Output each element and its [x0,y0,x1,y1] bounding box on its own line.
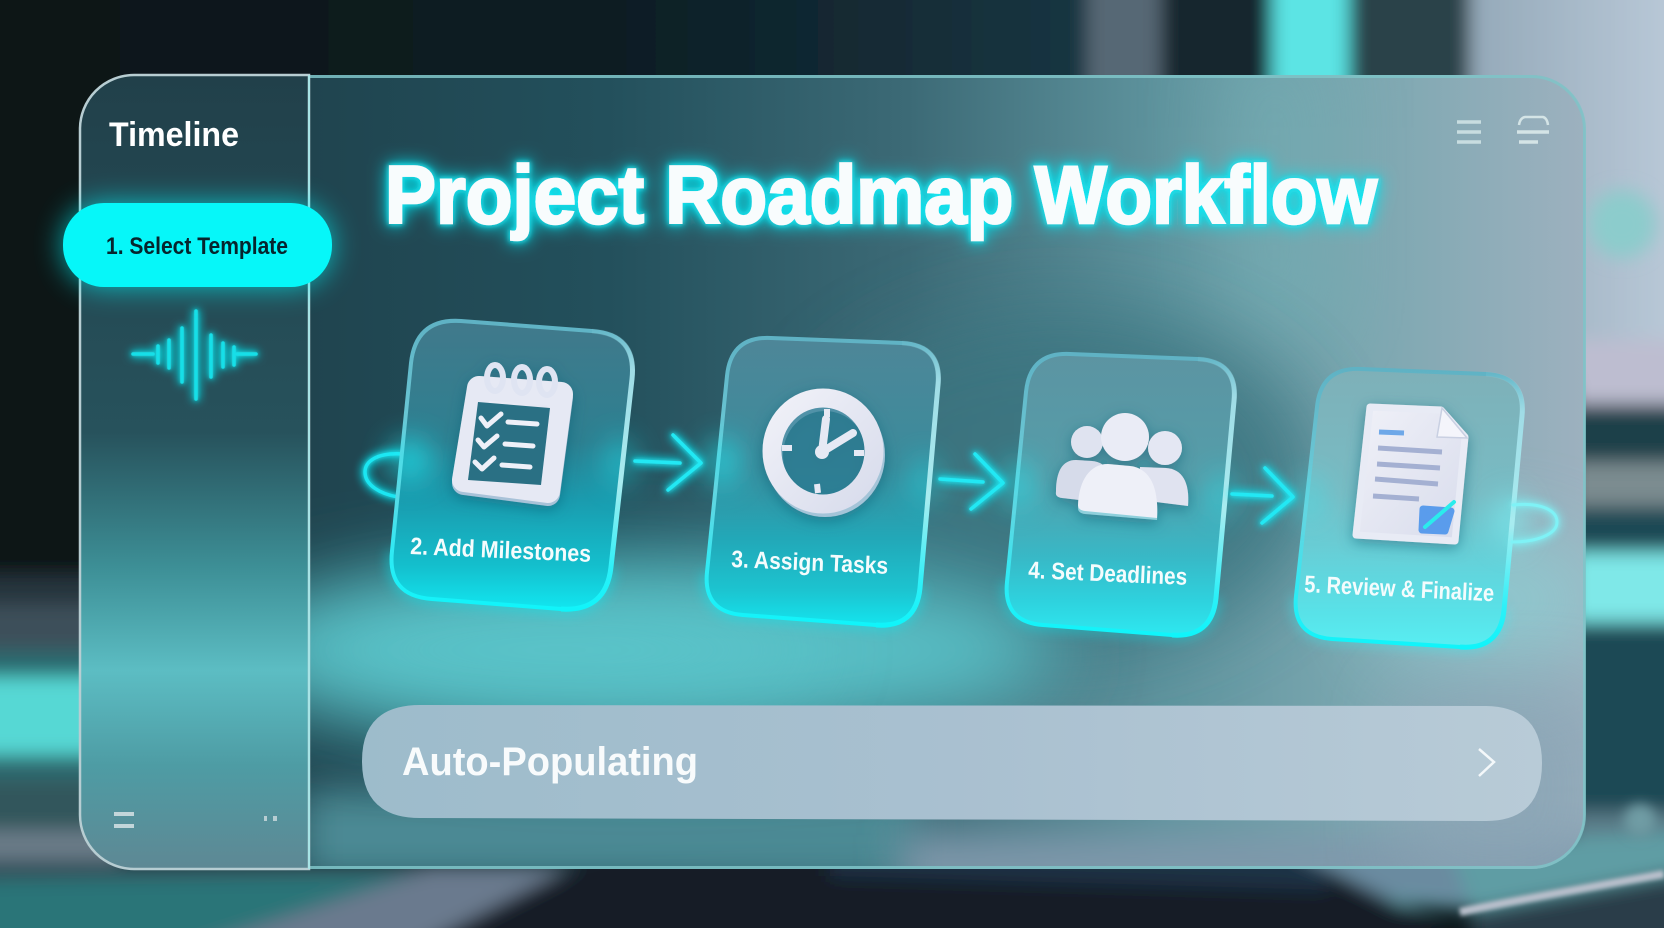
arrow: step 2 to 3 [635,435,701,490]
active step pill: 1. Select Template: 1. Select Template [106,233,288,260]
icon: document with pen [1356,407,1467,541]
label: 3. Assign Tasks [731,546,889,580]
icon: clock [772,398,876,508]
label: 2. Add Milestones [410,533,592,568]
main title: Project Roadmap Workflow [385,150,1377,241]
label: 5. Review & Finalize [1304,571,1495,607]
label: 4. Set Deadlines [1028,557,1188,591]
icon: chevron right [1479,749,1494,776]
icon: checklist notepad [464,365,561,494]
waveform icon [133,311,256,399]
card: 3. Assign Tasks [704,338,939,625]
arrow: step 3 to 4 [940,454,1003,509]
window menu icon [1457,122,1481,142]
sidebar panel [80,75,309,869]
arrow: step 4 to 5 [1232,468,1293,523]
icon: team of people [1056,413,1188,520]
card: 5. Review & Finalize [1296,369,1526,647]
auto-populating status bar [362,705,1542,821]
left loop connector [365,454,404,497]
window control icon [1517,117,1549,142]
sidebar footer menu icon [114,814,134,826]
auto-populating status bar: Auto-Populating [402,740,698,784]
sidebar footer dots [264,816,277,821]
active step pill: 1. Select Template [63,203,332,287]
right loop connector [1512,504,1557,542]
card: 2. Add Milestones [388,321,636,609]
sidebar heading: Timeline [109,116,239,154]
card: 4. Set Deadlines [1002,354,1236,635]
main glass panel [310,75,1586,869]
